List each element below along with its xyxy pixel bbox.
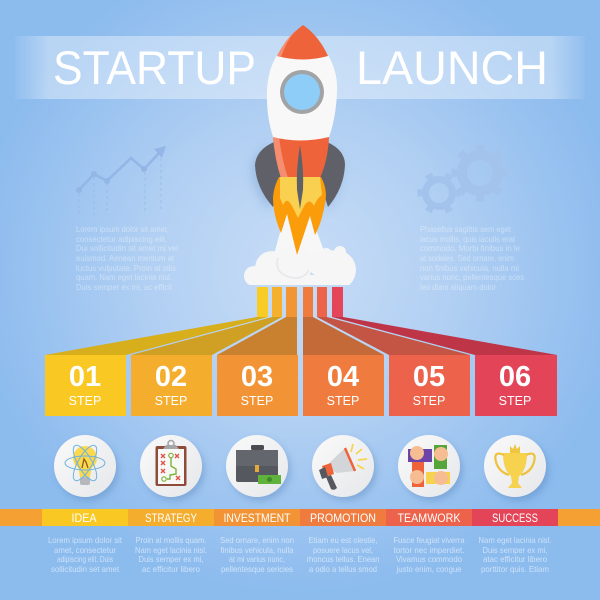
idea text: sollicitudin set amet [51,565,120,574]
nose highlight [277,30,296,57]
icon: gears [420,148,506,212]
investment text [220,536,294,574]
label band: TEAMWORK [398,513,461,525]
promotion text: rhoncus tellus. Enean [306,555,380,564]
investment text: at mi varius nunc, [229,555,285,564]
strategy text: Nam eget lacinia nisl. [135,546,207,555]
left text block: consectetur adipiscing elit. [76,234,167,244]
success text: atac efficitur libero [483,555,547,564]
left text block: euismod. Aenean mentum at [76,253,175,263]
teamwork text: tortor nec imperdiet. [394,546,464,555]
step 2: 02 [155,361,187,393]
right text block: at sodales. Sed ornare, enim [420,253,514,263]
step 6: STEP [499,394,531,408]
idea text: adipiscing elit. Duis [57,555,113,564]
idea text [48,536,123,574]
icon: hands [408,445,450,487]
investment text: Sed ornare, enim non [220,536,294,545]
success disc [484,435,546,497]
rocket fins [255,142,345,207]
success text: porttitor quis. Etiam [481,565,549,574]
investment text: finibus vehicula, nulla [220,546,294,555]
step 2: STEP [155,394,187,408]
title [53,41,548,94]
strategy text: Proin at mollis quam. [136,536,206,545]
strategy text: Duis semper ex mi, [138,555,204,564]
step 4 [303,355,384,416]
step 4: 04 [327,361,359,393]
right text block: Phasellus sagittis sem eget [420,224,512,234]
title: LAUNCH [356,41,548,94]
success text [478,536,552,574]
investment disc [226,435,288,497]
label band: SUCCESS [492,513,538,525]
left text block [76,224,178,292]
strategy text: ac efficitur libero [142,565,200,574]
right text block: lacus mollis, quis iaculis erat [420,234,516,244]
teamwork disc [398,435,460,497]
idea disc [54,435,116,497]
left text block: Lorem ipsum dolor sit amet, [76,224,169,234]
step 4: STEP [327,394,359,408]
rocket lower body [273,137,329,178]
step 5 [389,355,470,416]
rocket center fin [297,145,303,209]
idea text: Lorem ipsum dolor sit [48,536,123,545]
success text: Duis semper ex mi, [482,546,548,555]
teamwork text: Vivamus commodo [396,555,462,564]
teamwork text: justo enim, congue [396,565,462,574]
label band: PROMOTION [310,513,376,525]
step 3: STEP [241,394,273,408]
step 6 [475,355,557,416]
label band [0,509,600,526]
investment text: pellentesque sericies [221,565,293,574]
step connector stripes [45,287,557,355]
title: STARTUP [53,41,256,94]
rocket flame [273,177,326,255]
rocket nose [277,25,328,60]
right text block [420,224,524,292]
rocket white body [267,55,337,140]
step 1: 01 [69,361,101,393]
teamwork text [394,536,465,574]
step 3 [217,355,298,416]
step 5: STEP [413,394,445,408]
idea text: amet, consectetur [54,546,116,555]
rocket [255,25,345,255]
success text: Nam eget lacinia nisl. [478,536,552,545]
step 2 [131,355,212,416]
right text block: non finibus vehicula, nulla mi [420,263,519,273]
step 1 [45,355,126,416]
left text block: Dui sollicitudin sit amet mi vel [76,243,178,253]
icon: light bulb [65,442,105,485]
right text block: leo diam aliquam dolor [420,282,496,292]
icon: trophy [495,444,535,488]
right text block: commodo. Morbi finibus in le [420,243,520,253]
promotion text: a odio a tellus smod [309,565,377,574]
left text block: luctus vulputate. Proin at ollis [76,263,176,273]
promotion text: posuere lacus vel, [313,546,373,555]
label band: IDEA [72,513,97,525]
exhaust cloud [244,214,356,285]
strategy disc [140,435,202,497]
step 5: 05 [413,361,445,393]
step 3: 03 [241,361,273,393]
strategy text [135,536,207,574]
icon: megaphone [319,444,367,490]
label band: INVESTMENT [224,513,290,525]
step 6: 06 [499,361,531,393]
step 1: STEP [69,394,101,408]
icon: growth chart [76,146,166,215]
rocket window [280,70,324,114]
title band [15,36,585,99]
promotion text: Etiam eu est olestie, [308,536,378,545]
promotion text [306,536,380,574]
right text block: varius nunc, pellentesque sces [420,272,524,282]
icon: clipboard [156,440,186,486]
promotion disc [312,435,374,497]
label band: STRATEGY [145,513,197,525]
teamwork text: Fusce feugiat viverra [394,536,465,545]
left text block: quam. Nam eget lacinia nisl. [76,272,172,282]
icon: briefcase [236,445,281,484]
left text block: Duis semper ex mi, ac efficit [76,282,173,292]
